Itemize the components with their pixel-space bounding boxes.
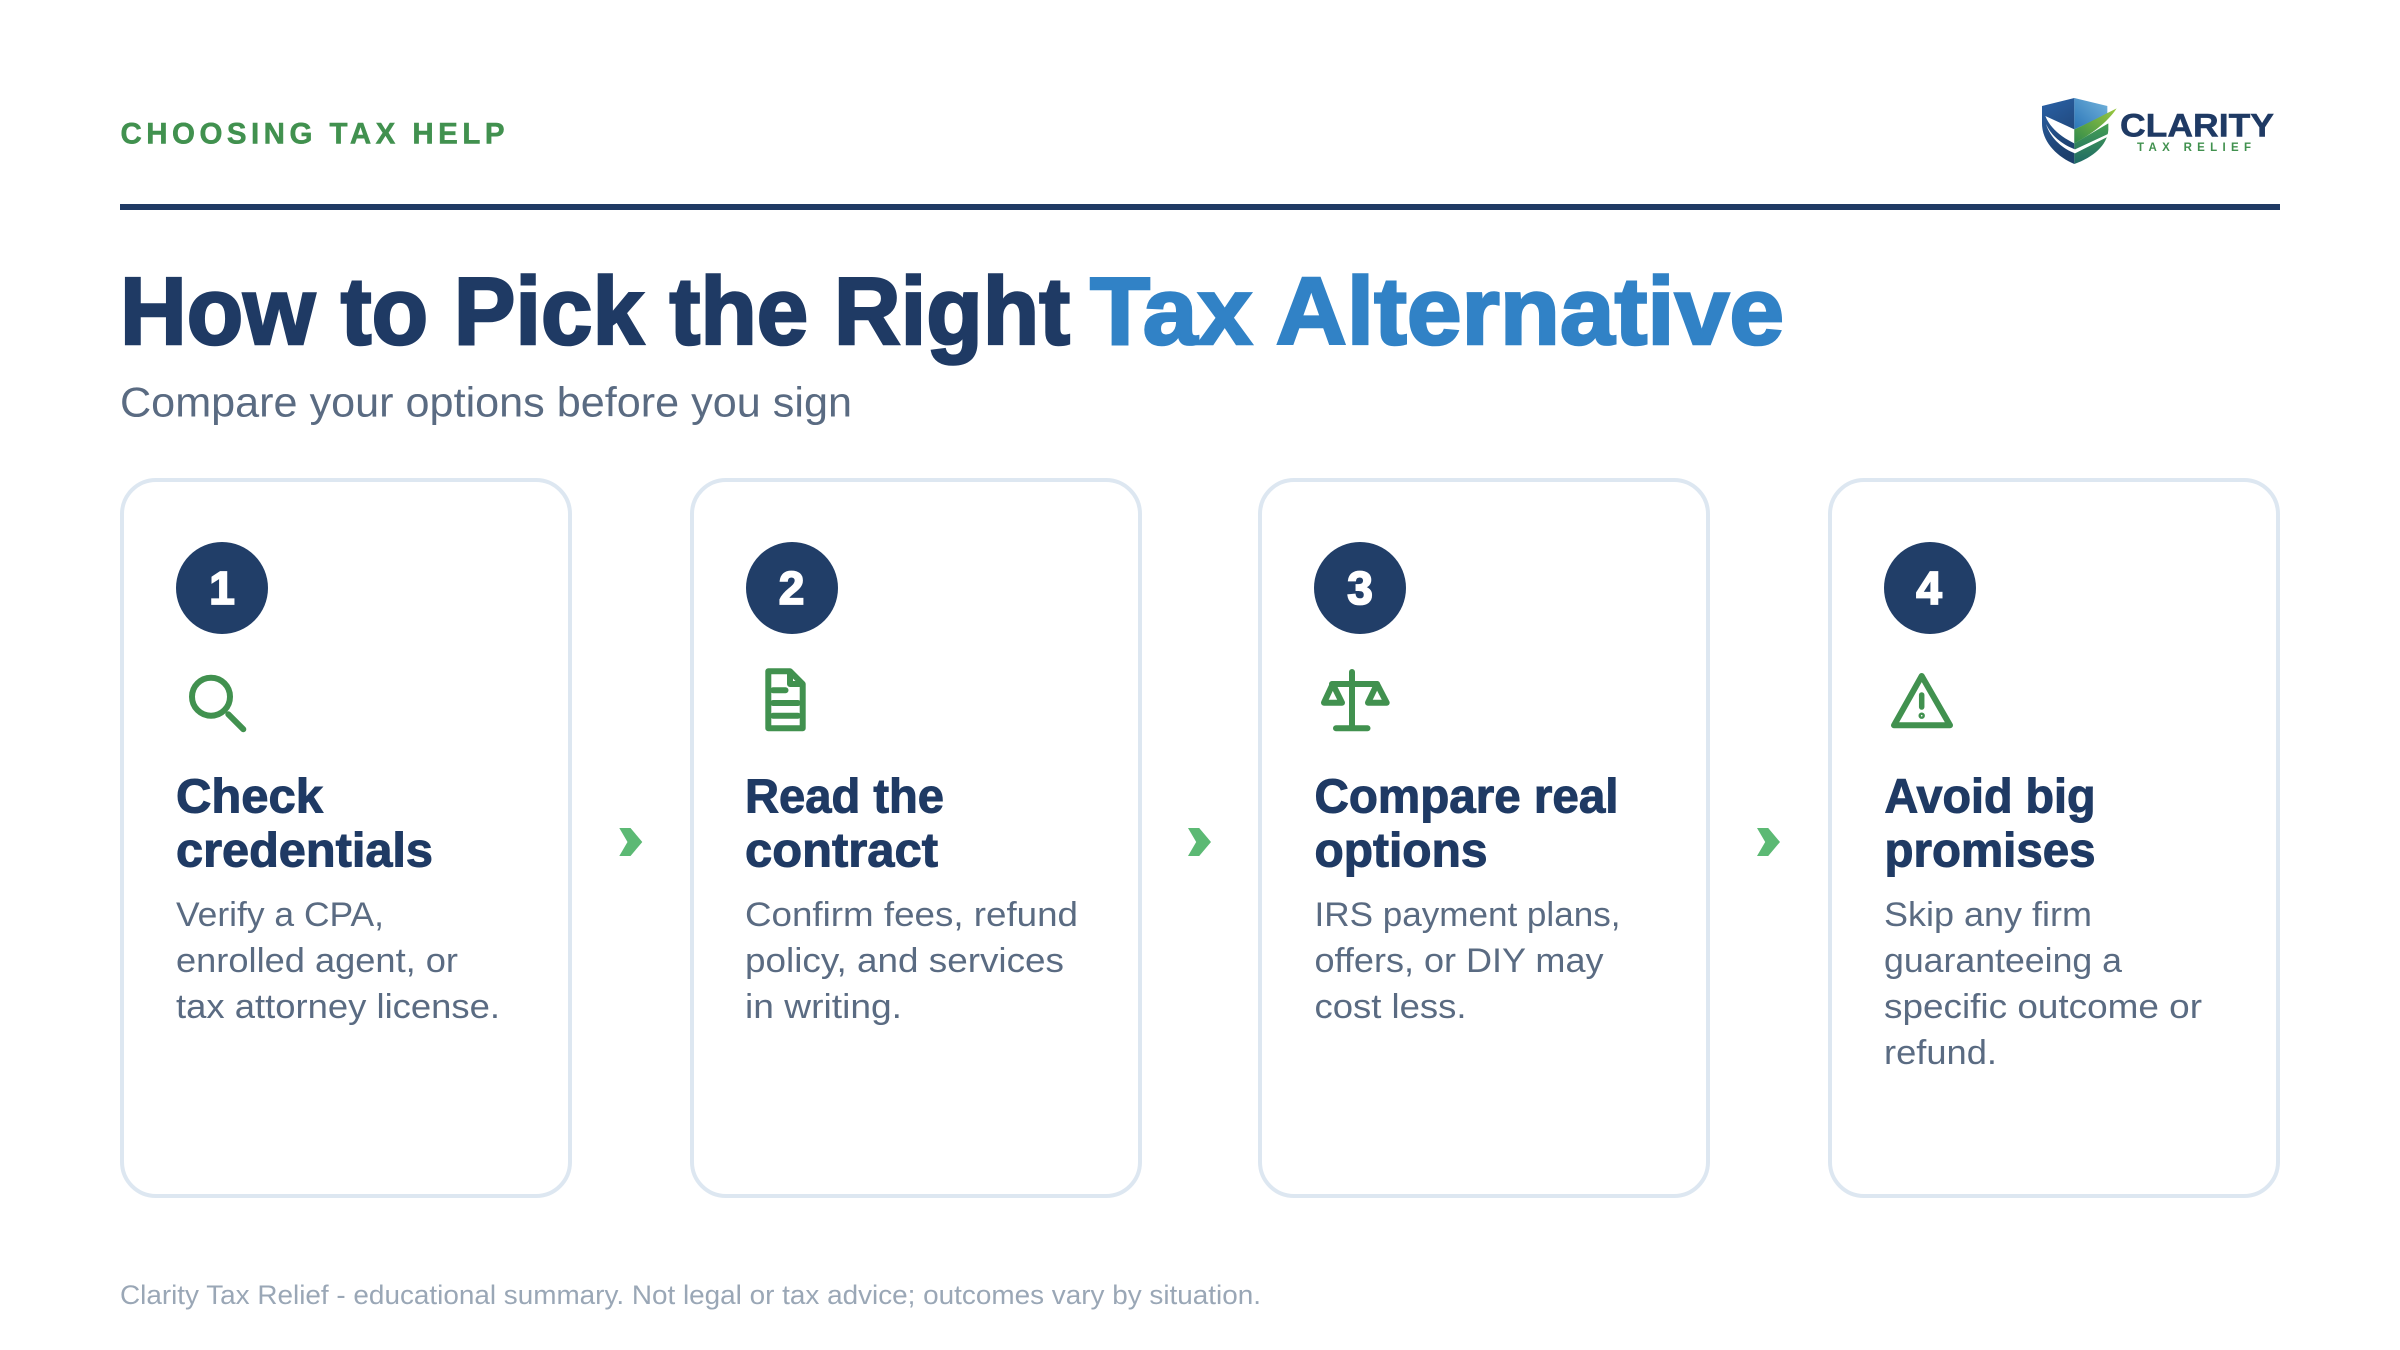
description: IRS payment plans, — [1314, 896, 1620, 934]
arrow 3 — [1757, 828, 1780, 856]
heading: credentials — [176, 824, 433, 878]
icon: warning triangle — [1894, 676, 1950, 725]
description: policy, and services — [745, 942, 1064, 980]
step number 4: 4 — [1916, 562, 1942, 614]
heading: contract — [745, 824, 938, 878]
description — [1314, 896, 1620, 1026]
description — [1884, 896, 2202, 1072]
heading — [1884, 770, 2096, 878]
heading: options — [1314, 824, 1488, 878]
step number 1 — [176, 542, 268, 634]
arrow 2 — [1188, 828, 1211, 856]
header rule — [120, 204, 2280, 210]
description: Skip any firm — [1884, 896, 2092, 934]
icon: balance scale — [1324, 672, 1387, 728]
description: offers, or DIY may — [1314, 942, 1604, 980]
eyebrow label: CHOOSING TAX HELP — [120, 118, 504, 150]
step number 2: 2 — [779, 562, 804, 614]
logo: Clarity Tax Relief — [2042, 98, 2274, 164]
title: Tax Alternative — [1090, 258, 1784, 365]
heading: Check — [176, 770, 323, 824]
icon: magnifying glass — [192, 678, 243, 729]
arrow 1 — [619, 828, 642, 856]
subtitle: Compare your options before you sign — [120, 378, 852, 426]
description: refund. — [1884, 1034, 1997, 1072]
panel: step 3 compare real options — [1260, 480, 1708, 1196]
step number 2 — [746, 542, 838, 634]
heading — [176, 770, 433, 878]
panel: step 2 read the contract — [692, 480, 1140, 1196]
step number 4 — [1884, 542, 1976, 634]
panel: step 1 check credentials — [122, 480, 570, 1196]
heading — [745, 770, 944, 878]
step number 3: 3 — [1347, 562, 1373, 614]
description: Verify a CPA, — [176, 896, 384, 934]
description — [745, 896, 1078, 1026]
heading: promises — [1884, 824, 2096, 878]
heading: Compare real — [1314, 770, 1618, 824]
description: tax attorney license. — [176, 988, 500, 1026]
description: guaranteeing a — [1884, 942, 2122, 980]
heading: Read the — [745, 770, 944, 824]
heading: Avoid big — [1884, 770, 2096, 824]
icon: shield with check — [2042, 98, 2117, 164]
description: in writing. — [745, 988, 902, 1026]
description: Confirm fees, refund — [745, 896, 1078, 934]
description: specific outcome or — [1884, 988, 2202, 1026]
panel: step 4 avoid big promises — [1830, 480, 2278, 1196]
description: enrolled agent, or — [176, 942, 458, 980]
step number 3 — [1314, 542, 1406, 634]
icon: document — [768, 671, 803, 728]
step number 1: 1 — [209, 562, 235, 614]
description: cost less. — [1314, 988, 1466, 1026]
heading — [1314, 770, 1618, 878]
footer disclaimer: Clarity Tax Relief - educational summary. Not legal or tax advice; outcomes vary by situation. — [120, 1280, 1261, 1310]
title — [120, 258, 1784, 365]
title: How to Pick the Right — [120, 258, 1070, 365]
logo tagline: TAX RELIEF — [2137, 142, 2251, 154]
logo wordmark: CLARITY — [2120, 108, 2274, 144]
description — [176, 896, 500, 1026]
